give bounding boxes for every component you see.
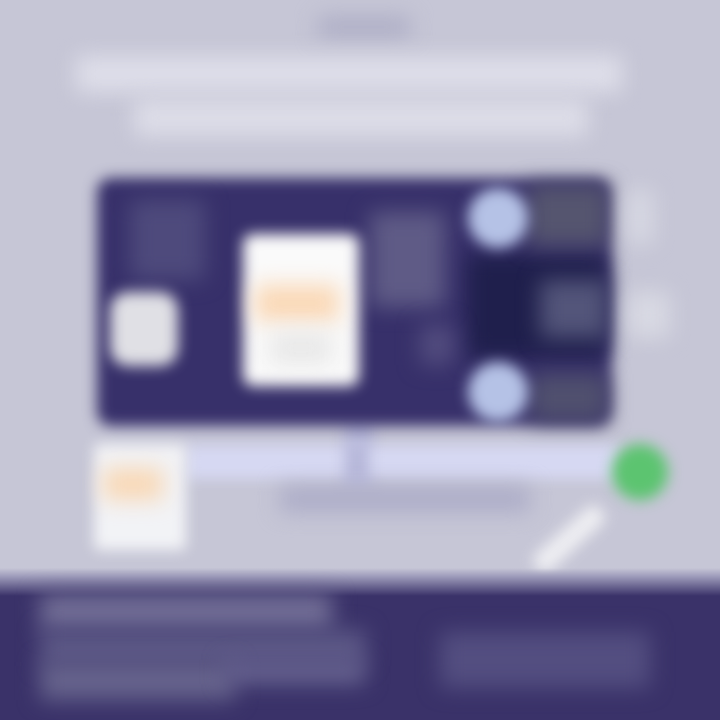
phone card — [243, 234, 359, 386]
monitor stand neck — [345, 420, 373, 482]
small heading above title — [318, 17, 410, 37]
paper sheet — [94, 444, 186, 550]
title line 2 — [134, 100, 588, 136]
base shadow — [280, 486, 530, 512]
monitor illustration — [86, 166, 677, 572]
monitor base neck highlight — [345, 442, 369, 484]
left faint text — [130, 200, 205, 280]
monitor base bar — [185, 445, 620, 479]
right faint label middle — [628, 292, 670, 338]
orange chart on phone — [255, 285, 339, 321]
bottom node circle — [468, 362, 528, 422]
title line 1 — [76, 56, 622, 92]
monitor screen — [97, 178, 611, 426]
title — [72, 50, 626, 140]
green check circle — [612, 444, 668, 500]
footer body lower left — [40, 662, 235, 700]
middle info block — [540, 280, 608, 338]
pencil — [530, 502, 608, 576]
orange chart on paper — [103, 468, 163, 500]
small faint mark — [420, 325, 454, 365]
top node circle — [468, 188, 528, 248]
footer body lower right — [225, 660, 365, 684]
footer heading — [40, 594, 332, 630]
dark right column — [467, 254, 607, 358]
right faint label top — [626, 190, 654, 244]
footer body upper — [40, 630, 366, 666]
footer band — [0, 568, 720, 720]
left white badge — [110, 292, 178, 366]
footer right text — [440, 632, 650, 688]
phone text — [270, 332, 332, 364]
bottom info block — [530, 374, 608, 422]
center faint text — [370, 212, 445, 307]
top info block — [527, 184, 609, 246]
